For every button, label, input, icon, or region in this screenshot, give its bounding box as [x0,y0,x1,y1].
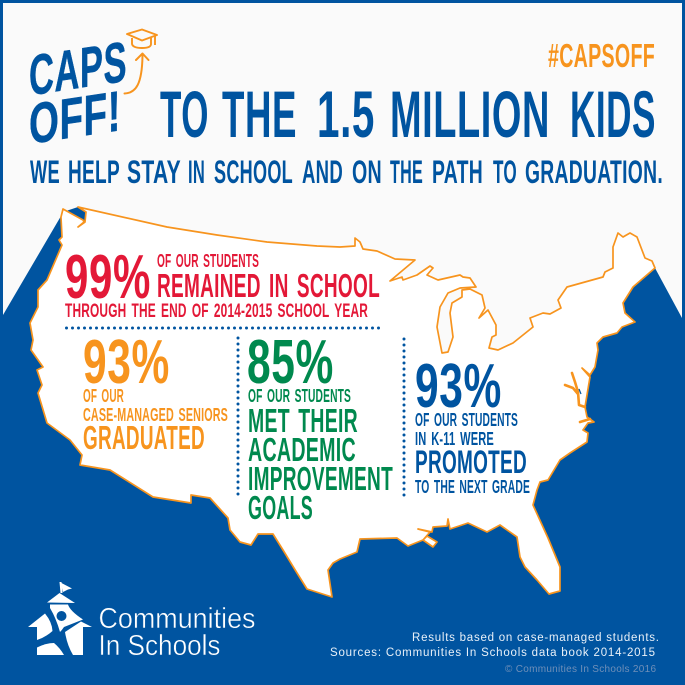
qualifier text: IN K-11 WERE [415,429,494,449]
detail text: THROUGH THE END OF 2014-2015 SCHOOL YEAR [65,300,368,322]
emphasis text: GRADUATED [83,419,205,456]
percent figure: 99% [65,243,151,312]
logo heading: Caps Off! [29,30,157,157]
subtitle: AND [302,154,343,190]
qualifier text: CASE-MANAGED SENIORS [83,405,228,425]
icon: curved arrow [124,54,148,94]
emphasis line 1: MET THEIR [248,403,358,440]
detail text: TO THE NEXT GRADE [415,477,530,497]
lead-in text: OF OUR STUDENTS [248,386,351,406]
stat: 85 percent met goals [247,328,393,527]
map of the United States [30,207,655,597]
percent figure: 93% [83,328,170,397]
emphasis line 4: GOALS [248,490,313,527]
title: THE [222,77,297,151]
logo: Communities In Schools [28,582,256,662]
subtitle: PATH [432,154,483,190]
copyright: © Communities In Schools 2016 [505,664,656,675]
emphasis line 2: ACADEMIC [248,432,356,469]
title: 1.5 [317,77,375,151]
stat: 93 percent promoted [415,352,530,497]
subtitle: ON [352,154,382,190]
subtitle: TO [493,154,517,190]
emphasis line 3: IMPROVEMENT [248,461,393,498]
icon: schoolhouse with figure [28,582,92,655]
subtitle: STAY [127,154,181,190]
subtitle: HELP [68,154,120,190]
subtitle: IN [188,154,205,190]
subtitle [30,154,663,190]
icon: graduation cap [127,30,157,48]
lead-in text: OF OUR [83,386,124,406]
light background panel [3,3,682,353]
emphasis text: REMAINED IN SCHOOL [157,268,380,305]
Off word: OFF! [29,79,121,157]
stat: 99 percent remained in school [65,243,380,322]
Caps word: CAPS [29,30,127,108]
note line: Results based on case-managed students. [412,632,659,644]
subtitle: THE [390,154,423,190]
footnote [330,632,659,675]
wordmark line 2: In Schools [98,630,220,662]
title: MILLION [390,77,550,151]
emphasis text: PROMOTED [415,444,527,480]
title: TO [160,77,209,151]
subtitle: WE [30,154,60,190]
percent figure: 85% [247,328,334,397]
wordmark line 1: Communities [98,603,256,635]
percent figure: 93% [415,352,502,421]
lead-in text: OF OUR STUDENTS [157,251,259,271]
sources line: Sources: Communities In Schools data book 2014-2015 [330,647,655,659]
stat: 93 percent graduated [83,328,228,456]
lead-in text: OF OUR STUDENTS [415,410,518,430]
title [160,77,656,151]
subtitle: SCHOOL [214,154,293,190]
